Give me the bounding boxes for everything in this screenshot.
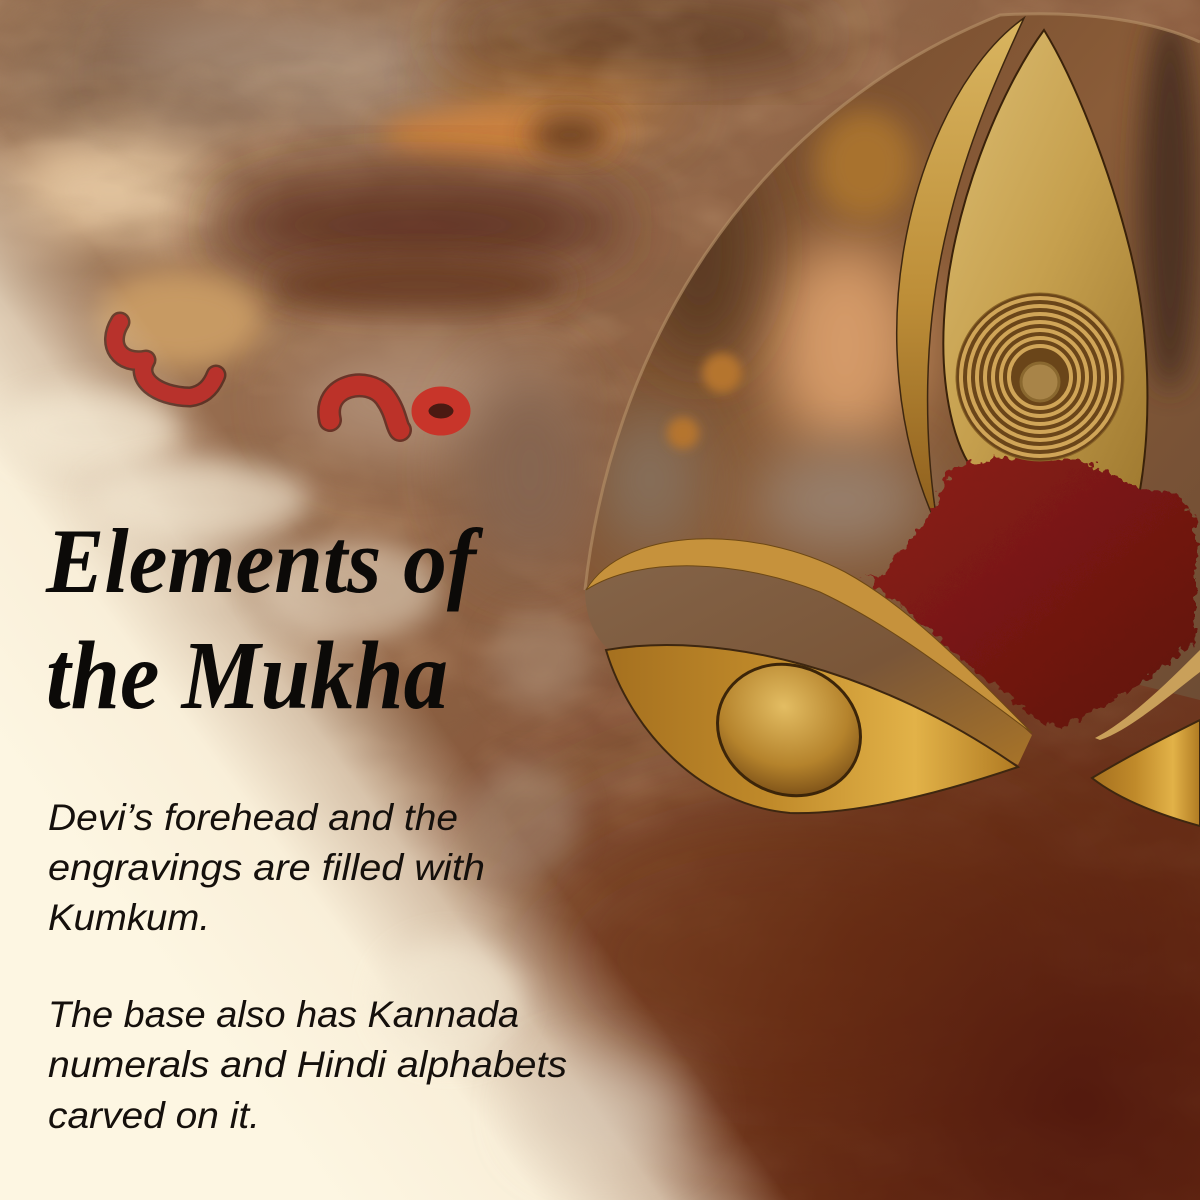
brass crescent (897, 18, 1024, 528)
title: Elements of (45, 510, 484, 612)
dome rim (585, 14, 1200, 590)
engraved hindi letters (329, 385, 462, 430)
text block: kumkum (48, 797, 485, 938)
eye pupil (696, 641, 882, 819)
text block: kumkum: Kumkum. (48, 897, 210, 938)
text block: numerals: carved on it. (48, 1095, 260, 1136)
kumkum red powder (865, 456, 1196, 728)
text block: numerals: numerals and Hindi alphabets (48, 1044, 567, 1085)
title: the Mukha (46, 622, 448, 730)
text block: numerals: The base also has Kannada (48, 994, 519, 1035)
spiral coil (956, 293, 1124, 461)
forehead dome (580, 0, 1200, 720)
title (45, 510, 484, 730)
engraved kannada numeral (114, 322, 216, 397)
text block: kumkum: engravings are filled with (48, 847, 485, 888)
main eye with brow (585, 539, 1032, 819)
text block: kumkum: Devi’s forehead and the (48, 797, 458, 838)
text block: numerals (48, 994, 567, 1136)
second eye fragment (1092, 650, 1200, 826)
brass third-eye leaf (943, 30, 1147, 490)
